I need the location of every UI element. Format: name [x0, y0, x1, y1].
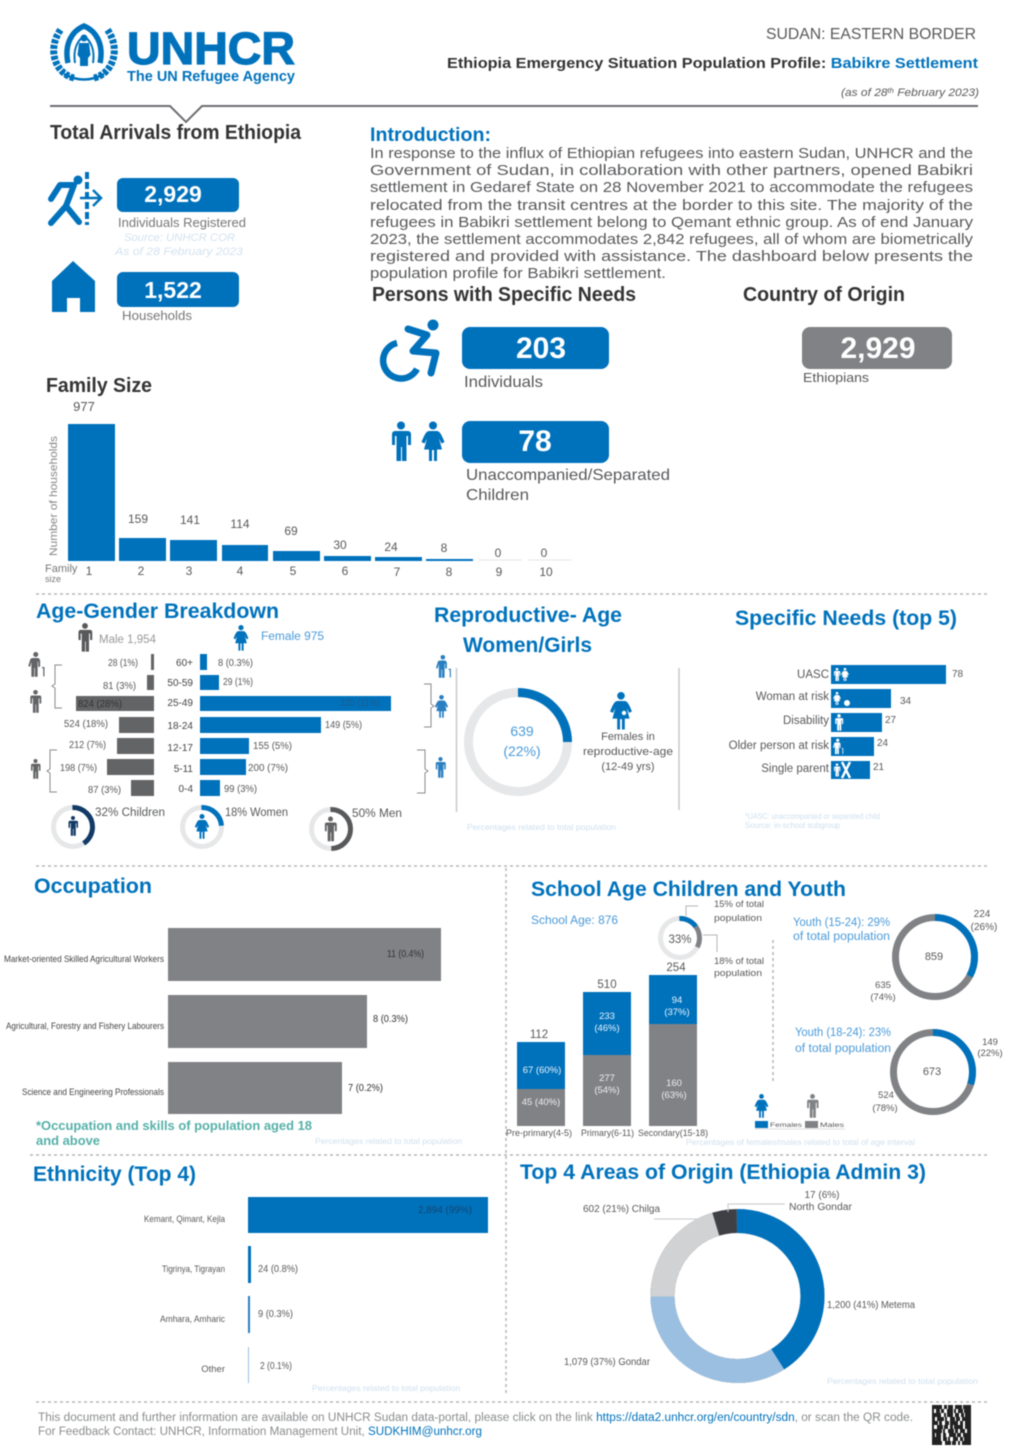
- bar chart: specific needs: 78: [952, 669, 964, 680]
- introduction paragraph: 2023, the settlement accommodates 2,842 refugees, all of whom are biometrically: [370, 231, 974, 248]
- stacked bar chart: school age: (37%): [664, 1007, 690, 1018]
- stat: individuals registered: As of 28 February 2023: [114, 246, 244, 258]
- stat: households: Households: [122, 309, 192, 323]
- panel: total arrivals: [50, 122, 302, 323]
- bar chart: family size: 114: [230, 517, 250, 531]
- panel: specific needs top 5: [729, 607, 964, 830]
- icon: person crossing border: [51, 172, 101, 225]
- population pyramid chart: 200 (7%): [248, 763, 288, 774]
- report date: February 2023): [894, 87, 979, 99]
- note: occupation population: [36, 1119, 462, 1148]
- stacked bar chart: school age: Pre-primary(4-5): [506, 1128, 572, 1138]
- donut: women 18%: 18% Women: [225, 807, 288, 819]
- legend: male total: Male 1,954: [99, 634, 157, 646]
- population pyramid chart: 81 (3%): [103, 681, 136, 692]
- stat: individuals with specific needs: 203: [516, 332, 566, 365]
- donut: youth 15-24: [793, 909, 997, 1003]
- heading: reproductive-age women/girls: Women/Girls: [463, 634, 592, 657]
- report date: th: [888, 88, 894, 95]
- legend: female total: Female 975: [261, 631, 324, 643]
- panel: introduction: [370, 125, 974, 282]
- bar chart: ethnicity: Amhara, Amharic: [160, 1314, 225, 1325]
- header: logo and titles: [54, 23, 979, 99]
- note: occupation population: *Occupation and skills of population aged 18: [36, 1119, 312, 1133]
- bar chart: occupation: Agricultural, Forestry and Fishery Labourers: [6, 1021, 164, 1032]
- population pyramid chart: 50-59: [167, 678, 193, 689]
- bar chart: ethnicity: 24 (0.8%): [258, 1264, 298, 1275]
- heading: top 4 areas of origin: Top 4 Areas of Origin (Ethiopia Admin 3): [520, 1161, 926, 1184]
- heading: reproductive-age women/girls: [434, 604, 622, 657]
- note: UASC definition and source: *UASC: unaccompanied or separated child: [745, 811, 880, 821]
- population pyramid chart: 149 (5%): [325, 720, 362, 731]
- population pyramid chart: 87 (3%): [88, 785, 121, 796]
- heading: persons with specific needs: Persons with Specific Needs: [372, 284, 636, 306]
- heading: age-gender breakdown: Age-Gender Breakdown: [36, 600, 279, 623]
- population pyramid chart: 18-24: [167, 721, 193, 732]
- bar chart: family size: 8: [441, 541, 448, 555]
- stat: individuals registered: Individuals Registered: [118, 216, 246, 230]
- bar chart: specific needs: Woman at risk: [756, 691, 829, 703]
- bar chart: family size: 8: [446, 565, 453, 579]
- population pyramid chart: 60+: [176, 658, 193, 669]
- donut: 33% school age: [660, 899, 764, 979]
- icon: wheelchair: [383, 320, 438, 379]
- bar chart: ethnicity: Tigrinya, Tigrayan: [162, 1264, 225, 1275]
- bar chart: occupation: 7 (0.2%): [348, 1083, 383, 1094]
- population pyramid chart: [60, 654, 391, 796]
- donut: youth 18-24: [795, 1027, 1003, 1114]
- bar chart: family size: 9: [496, 565, 503, 579]
- donut: youth 15-24: Youth (15-24): 29%: [793, 917, 890, 929]
- panel: ethnicity: [33, 1163, 488, 1393]
- stacked bar chart: school age: 112: [530, 1029, 548, 1041]
- axis label: number of households: Number of households: [48, 435, 60, 556]
- note: UASC definition and source: [745, 811, 880, 830]
- stacked bar chart: school age: 67 (60%): [523, 1065, 561, 1076]
- population pyramid chart: 8 (0.3%): [218, 658, 253, 669]
- brackets and age group icons: male: [28, 652, 62, 792]
- bar chart: occupation: [4, 928, 441, 1114]
- labels: areas of origin: 17 (6%): [804, 1190, 840, 1201]
- donut: 639 women of reproductive age: [468, 692, 568, 792]
- stat: households: 1,522: [144, 277, 202, 303]
- panel: school age children and youth: [506, 878, 1003, 1147]
- label: females in reproductive age: reproductive-age: [583, 746, 673, 758]
- heading: introduction: Introduction:: [370, 125, 491, 146]
- introduction paragraph: [370, 145, 974, 282]
- note: percentages: Percentages related to total population: [827, 1376, 978, 1386]
- stat: unaccompanied children: Children: [466, 487, 529, 504]
- labels: areas of origin: 602 (21%) Chilga: [583, 1204, 660, 1215]
- stat: individuals with specific needs: Individuals: [464, 374, 543, 391]
- introduction paragraph: relocated from the transit centres at the border to this site. The majority of the: [370, 197, 973, 214]
- donut: youth 18-24: 149: [982, 1037, 998, 1048]
- bar chart: family size: [45, 399, 572, 584]
- stat: individuals registered: [114, 178, 246, 258]
- bar chart: specific needs: Single parent: [761, 763, 830, 775]
- donut: youth 18-24: of total population: [795, 1043, 891, 1055]
- stat: individuals registered: 2,929: [144, 181, 202, 207]
- bar chart: ethnicity: [144, 1197, 488, 1383]
- bar chart: family size: 7: [394, 565, 401, 579]
- icon: house: [52, 261, 95, 312]
- heading: occupation: Occupation: [34, 875, 152, 898]
- stacked bar chart: school age: Primary(6-11): [581, 1128, 634, 1138]
- panel: age-gender breakdown: [28, 600, 451, 848]
- bar chart: occupation: Science and Engineering Professionals: [22, 1087, 164, 1098]
- legend: females and males: [755, 1094, 845, 1129]
- report title: Ethiopia Emergency Situation Population Profile: Babikre Settlement: [447, 55, 978, 72]
- donut: youth 15-24: 224: [974, 909, 991, 920]
- bar chart: ethnicity: 2 (0.1%): [260, 1361, 292, 1372]
- donut: youth 15-24: of total population: [793, 931, 890, 943]
- stacked bar chart: school age: 510: [597, 979, 617, 991]
- donut: men 50%: 50% Men: [352, 808, 402, 820]
- population pyramid chart: 524 (18%): [64, 719, 108, 730]
- donut: youth 15-24: 859: [925, 951, 943, 963]
- donut: youth 15-24: (26%): [971, 922, 997, 933]
- donut: youth 15-24: (74%): [870, 992, 896, 1003]
- donut: youth 18-24: Youth (18-24): 23%: [795, 1027, 891, 1039]
- bar chart: specific needs: Disability: [783, 715, 829, 727]
- labels: areas of origin: North Gondar: [789, 1202, 853, 1213]
- bar chart: family size: 4: [237, 564, 244, 578]
- bar chart: family size: 3: [186, 564, 193, 578]
- stat: ethiopians: 2,929: [840, 332, 916, 365]
- population pyramid chart: 29 (1%): [223, 677, 253, 688]
- icon: two children: [392, 422, 444, 461]
- labels: areas of origin: 1,200 (41%) Metema: [827, 1300, 915, 1311]
- introduction paragraph: settlement in Gedaref State on 28 November 2021 to accommodate the refugees: [370, 179, 973, 196]
- donut: 33% school age: population: [714, 968, 762, 979]
- brackets and age group icons: female: [417, 655, 451, 793]
- report date: (as of 28: [841, 87, 884, 99]
- icon: UNHCR wreath emblem: [54, 26, 114, 80]
- footer line: feedback contact: For Feedback Contact: UNHCR, Information Management Unit, SUDKHIM@unhcr.org: [38, 1426, 482, 1438]
- stacked bar chart: school age: 233: [599, 1011, 615, 1022]
- stacked bar chart: school age: 94: [672, 995, 682, 1006]
- bar chart: specific needs: UASC: [797, 669, 829, 681]
- population pyramid chart: 155 (5%): [253, 741, 292, 752]
- bar chart: family size: 0: [541, 546, 548, 560]
- stat: ethiopians: Ethiopians: [803, 370, 870, 385]
- introduction paragraph: Government of Sudan, in collaboration with other partners, opened Babikri: [370, 162, 973, 179]
- population pyramid chart: 212 (7%): [69, 740, 106, 751]
- donut: women 18%: [182, 807, 288, 846]
- bar chart: specific needs: 27: [885, 715, 897, 726]
- bar chart: ethnicity: 2,894 (99%): [418, 1205, 472, 1216]
- logo tagline: The UN Refugee Agency: [127, 68, 296, 85]
- population pyramid chart: 335 (11%): [340, 698, 380, 709]
- donut: 33% school age: 15% of total: [714, 899, 764, 910]
- introduction paragraph: refugees in Babikri settlement belong to Qemant ethnic group. As of end January: [370, 214, 974, 231]
- labels: areas of origin: 1,079 (37%) Gondar: [564, 1357, 651, 1368]
- bar chart: family size: 159: [128, 512, 148, 526]
- introduction paragraph: population profile for Babikri settlement.: [370, 265, 666, 282]
- donut: 639 women of reproductive age: (22%): [503, 743, 541, 759]
- heading: total arrivals: Total Arrivals from Ethiopia: [50, 122, 302, 144]
- donut: 33% school age: 33%: [668, 934, 692, 946]
- stacked bar chart: school age: [506, 962, 708, 1138]
- bar chart: family size: Family: [45, 563, 78, 575]
- panel: persons with specific needs: [372, 284, 670, 504]
- legend: females and males: Females: [770, 1122, 803, 1129]
- icon: male: [78, 623, 92, 652]
- note: percentages: Percentages related to total population: [467, 822, 616, 832]
- donut: men 50%: [312, 808, 402, 848]
- logo: UNHCR: [54, 23, 296, 85]
- population pyramid chart: 25-49: [167, 698, 193, 709]
- stat: unaccompanied children: Unaccompanied/Separated: [466, 467, 670, 484]
- heading: specific needs top 5: Specific Needs (top 5): [735, 607, 957, 630]
- donut chart: areas of origin: [662, 1221, 812, 1371]
- bar chart: ethnicity: 9 (0.3%): [258, 1309, 293, 1320]
- panel: family size: [45, 375, 572, 584]
- introduction paragraph: registered and provided with assistance. The dashboard below presents the: [370, 248, 973, 265]
- logo wordmark: UNHCR: [127, 23, 295, 74]
- stat: households: [117, 272, 239, 323]
- panel: country of origin: [743, 284, 952, 385]
- label: school age total: School Age: 876: [531, 913, 618, 927]
- donut: youth 18-24: 524: [878, 1090, 894, 1101]
- bar chart: family size: size: [45, 574, 61, 584]
- bar chart: occupation: Market-oriented Skilled Agricultural Workers: [4, 954, 164, 965]
- stacked bar chart: school age: 45 (40%): [522, 1097, 560, 1108]
- label: females in reproductive age: Females in: [601, 731, 655, 743]
- bar chart: family size: 24: [384, 540, 398, 554]
- stat: unaccompanied children: [462, 421, 670, 504]
- stacked bar chart: school age: 277: [599, 1073, 615, 1084]
- donut: 33% school age: population: [714, 913, 762, 924]
- QR code: [932, 1407, 971, 1443]
- donut: youth 18-24: (78%): [872, 1103, 898, 1114]
- bar chart: ethnicity: Kemant, Qimant, Kejla: [144, 1214, 226, 1225]
- bar chart: family size: 6: [342, 564, 349, 578]
- legend: females and males: Males: [820, 1122, 845, 1129]
- stat: ethiopians: [802, 327, 952, 385]
- icon: pregnant woman: [610, 692, 632, 730]
- population pyramid chart: 99 (3%): [224, 784, 257, 795]
- population pyramid chart: 28 (1%): [108, 658, 138, 669]
- bar chart: family size: 10: [539, 565, 553, 579]
- donut: 639 women of reproductive age: 639: [510, 723, 534, 739]
- footer line: data portal: This document and further information are available on UNHCR Sudan data-portal, please click on the link https://data2.unhcr.org/en/country/sdn , or scan the QR code.: [38, 1412, 913, 1424]
- stacked bar chart: school age: (63%): [661, 1090, 687, 1101]
- location heading: SUDAN: EASTERN BORDER: [766, 26, 976, 43]
- panel: top 4 areas of origin: [520, 1161, 978, 1386]
- heading: school age children and youth: School Age Children and Youth: [531, 878, 846, 901]
- introduction paragraph: In response to the influx of Ethiopian refugees into eastern Sudan, UNHCR and the: [370, 145, 973, 162]
- note: occupation population: Percentages related to total population: [315, 1136, 462, 1146]
- note: occupation population: and above: [36, 1134, 100, 1148]
- population pyramid chart: 0-4: [179, 784, 193, 795]
- bar chart: family size: 69: [284, 524, 298, 538]
- heading: reproductive-age women/girls: Reproductive- Age: [434, 604, 622, 627]
- stat: individuals registered: Source: UNHCR COR: [124, 232, 235, 244]
- population pyramid chart: 5-11: [174, 764, 193, 775]
- stat: individuals with specific needs: [462, 327, 609, 391]
- stacked bar chart: school age: 254: [666, 962, 686, 974]
- population pyramid chart: 198 (7%): [60, 763, 97, 774]
- donut: youth 15-24: 635: [875, 980, 891, 991]
- note: percentages by age interval: Percentages of females/males related to total of age interval: [686, 1137, 915, 1147]
- bar chart: specific needs: [729, 665, 964, 779]
- bar chart: family size: 5: [290, 564, 297, 578]
- icon: female: [234, 625, 248, 651]
- donut: youth 18-24: 673: [923, 1066, 941, 1078]
- bar chart: family size: 2: [138, 564, 145, 578]
- stacked bar chart: school age: (46%): [594, 1023, 620, 1034]
- footer: [38, 1407, 971, 1443]
- bar chart: family size: 977: [73, 399, 95, 414]
- population pyramid chart: 12-17: [167, 743, 193, 754]
- bar chart: specific needs: 24: [877, 738, 889, 749]
- panel: reproductive-age women and girls: [434, 604, 679, 832]
- label: females in reproductive age: (12-49 yrs): [601, 761, 655, 773]
- label: females in reproductive age: [583, 731, 673, 773]
- stacked bar chart: school age: 160: [666, 1078, 682, 1089]
- labels: areas of origin: [564, 1190, 915, 1368]
- bar chart: family size: 1: [86, 564, 93, 578]
- donut: youth 18-24: (22%): [977, 1048, 1003, 1059]
- stacked bar chart: school age: Secondary(15-18): [638, 1128, 708, 1138]
- donut: children 32%: [54, 807, 165, 846]
- heading: family size: Family Size: [46, 375, 152, 397]
- donut: 33% school age: 18% of total: [714, 956, 764, 967]
- bar chart: family size: 30: [333, 538, 347, 552]
- stacked bar chart: school age: (54%): [594, 1085, 620, 1096]
- bar chart: occupation: 8 (0.3%): [373, 1014, 408, 1025]
- bar chart: ethnicity: Other: [201, 1364, 225, 1375]
- bar chart: specific needs: 34: [900, 696, 912, 707]
- bar chart: specific needs: 21: [873, 762, 885, 773]
- donut: children 32%: 32% Children: [95, 807, 165, 819]
- bar chart: family size: 0: [495, 546, 502, 560]
- note: UASC definition and source: Source: in-school subgroup: [745, 820, 840, 830]
- population pyramid chart: 824 (28%): [78, 699, 122, 710]
- note: percentages: Percentages related to total population: [312, 1383, 460, 1393]
- stat: unaccompanied children: 78: [518, 425, 552, 458]
- bar chart: family size: 141: [180, 513, 200, 527]
- panel: occupation: [4, 875, 462, 1148]
- heading: country of origin: Country of Origin: [743, 284, 905, 306]
- heading: ethnicity: Ethnicity (Top 4): [33, 1163, 196, 1186]
- bar chart: specific needs: Older person at risk: [729, 740, 829, 752]
- bar chart: occupation: 11 (0.4%): [387, 949, 424, 960]
